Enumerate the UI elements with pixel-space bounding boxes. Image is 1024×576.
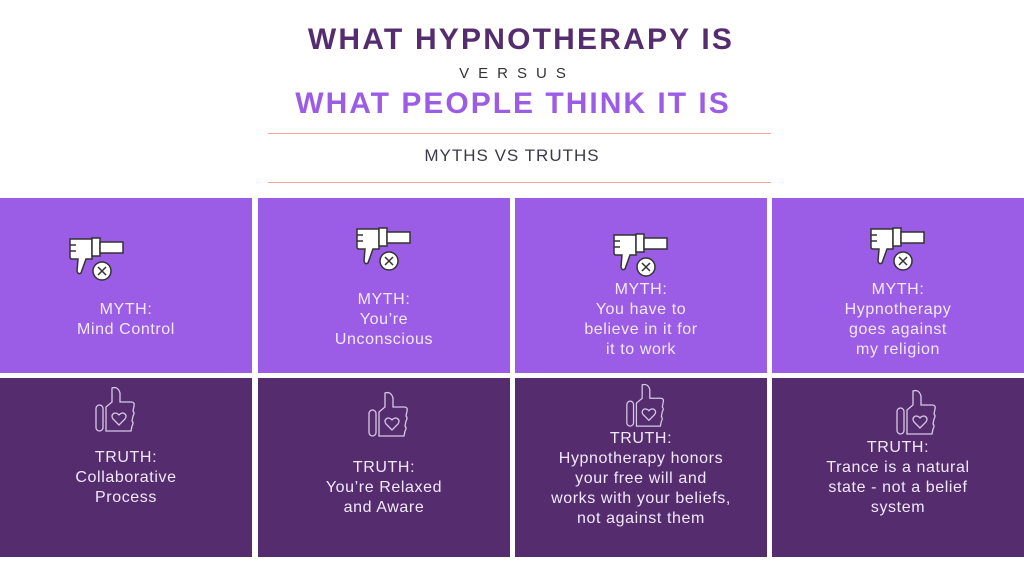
- text: myth 4: MYTH:: [872, 281, 924, 298]
- versus: VERSUS: [459, 65, 575, 82]
- text: truth 1: Collaborative: [75, 469, 177, 486]
- icon: thumbs down: [870, 227, 925, 271]
- icon: thumbs down: [69, 237, 124, 281]
- text: truth 3: not against them: [577, 510, 705, 527]
- text: myth 2: Unconscious: [335, 331, 433, 348]
- text: myth 4: my religion: [856, 341, 940, 358]
- text: myth 3: it to work: [606, 341, 676, 358]
- panel: truth 1: [0, 378, 252, 557]
- text: truth 1: [75, 449, 177, 506]
- text: myth 3: [584, 281, 698, 358]
- text: truth 3: Hypnotherapy honors: [559, 450, 723, 467]
- icon: thumbs up heart: [626, 384, 664, 427]
- panel: truth 3: [515, 378, 767, 557]
- text: truth 1: TRUTH:: [95, 449, 157, 466]
- icon: thumbs up heart: [368, 392, 408, 437]
- text: truth 4: [826, 439, 970, 516]
- icon: thumbs down: [356, 227, 411, 271]
- icon: thumbs up heart: [95, 386, 135, 432]
- text: myth 3: believe in it for: [584, 321, 698, 338]
- panel: myth 3: [515, 198, 767, 373]
- text: truth 2: and Aware: [344, 499, 424, 516]
- panel: myth 2: [258, 198, 510, 373]
- title: what hypnotherapy is: WHAT HYPNOTHERAPY IS: [308, 23, 734, 56]
- text: myth 2: MYTH:: [358, 291, 410, 308]
- text: truth 3: works with your beliefs,: [551, 490, 731, 507]
- text: truth 4: state - not a belief: [828, 479, 968, 496]
- text: myth 1: [77, 301, 175, 338]
- text: truth 3: [551, 430, 731, 527]
- text: truth 4: system: [871, 499, 925, 516]
- panel: truth 4: [772, 378, 1024, 557]
- text: myth 1: MYTH:: [100, 301, 152, 318]
- text: truth 4: TRUTH:: [867, 439, 929, 456]
- text: truth 1: Process: [95, 489, 157, 506]
- panel: myth 1: [0, 198, 252, 373]
- text: myth 4: Hypnotherapy: [845, 301, 951, 318]
- text: myth 4: goes against: [849, 321, 947, 338]
- subtitle: what people think it is: WHAT PEOPLE THINK IT IS: [295, 87, 731, 120]
- text: truth 2: [326, 459, 442, 516]
- text: myth 4: [845, 281, 951, 358]
- icon: thumbs down: [613, 233, 668, 277]
- text: truth 4: Trance is a natural: [826, 459, 970, 476]
- text: myth 2: [335, 291, 433, 348]
- text: truth 3: your free will and: [575, 470, 707, 487]
- text: myth 3: MYTH:: [615, 281, 667, 298]
- text: myth 2: You’re: [360, 311, 408, 328]
- text: truth 2: TRUTH:: [353, 459, 415, 476]
- text: myth 1: Mind Control: [77, 321, 175, 338]
- text: truth 3: TRUTH:: [610, 430, 672, 447]
- icon: thumbs up heart: [896, 390, 936, 435]
- panel: myth 4: [772, 198, 1024, 373]
- heading: myths vs truths: MYTHS VS TRUTHS: [424, 146, 600, 165]
- text: truth 2: You’re Relaxed: [326, 479, 442, 496]
- text: myth 3: You have to: [596, 301, 686, 318]
- panel: truth 2: [258, 378, 510, 557]
